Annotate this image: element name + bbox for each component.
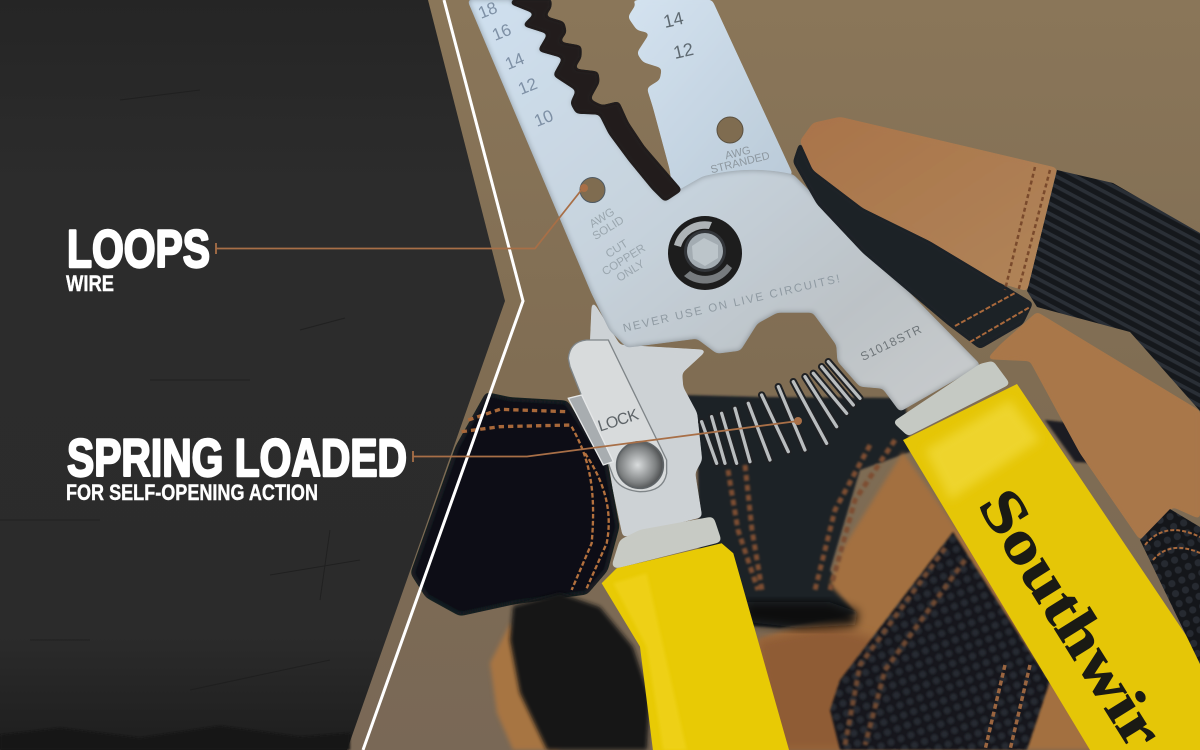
- gauge numbers: 14: [502, 49, 527, 74]
- engraving: never use on live circuits: NEVER USE ON LIVE CIRCUITS!: [622, 273, 841, 335]
- right finger: black trim: [793, 141, 1033, 349]
- leader line: spring: [413, 417, 802, 462]
- engraving: model number: S1018STR: [858, 322, 924, 364]
- engraving: awg solid: SOLID: [591, 214, 626, 243]
- gauge numbers: 12: [515, 74, 540, 99]
- lower thumb: black glove: [510, 593, 650, 750]
- leader line: loops: [216, 184, 588, 254]
- front jaw and pivot plate: [468, 0, 980, 411]
- callout: loops: [66, 184, 588, 296]
- palm stitching: [728, 440, 895, 590]
- palm tan leather: [757, 452, 1095, 750]
- left handle: [602, 517, 790, 750]
- engraving: cut copper only: ONLY: [615, 258, 647, 284]
- back glove: dark palm behind spring: [685, 395, 910, 628]
- numbers on back jaw: 14: [661, 8, 685, 32]
- left finger: black glove: [412, 393, 618, 615]
- spring: [702, 362, 860, 463]
- engraving: cut copper only: [593, 231, 655, 289]
- small black grip pad right: [1140, 509, 1200, 664]
- lock label: LOCK: [596, 406, 641, 435]
- back jaw of the stripper: 12: [671, 39, 695, 63]
- gauge numbers: 10: [531, 106, 556, 131]
- gauge numbers: 16: [489, 20, 514, 45]
- heading: spring loaded: SPRING LOADED: [67, 429, 407, 488]
- lock slider: [568, 340, 667, 492]
- right finger: tan lower leather: [987, 312, 1200, 540]
- engraving: cut copper only: COPPER: [600, 242, 648, 278]
- subheading: for self-opening action: FOR SELF-OPENING ACTION: [66, 480, 318, 505]
- left handle collar: [612, 517, 722, 568]
- rivet: [617, 442, 663, 488]
- lower thumb: tan tip: [490, 622, 560, 750]
- callout: spring loaded: [66, 417, 802, 505]
- engraving: awg stranded: AWG: [724, 144, 752, 162]
- dark chevron panel: [0, 0, 505, 750]
- black grip pad on palm: [830, 532, 1050, 750]
- hole: stranded gauge: [717, 117, 743, 143]
- engraving: awg stranded: STRANDED: [709, 150, 771, 176]
- clip rivet edge: [568, 395, 613, 465]
- blurred black fold under thumb: [745, 602, 858, 628]
- hole: solid gauge: [580, 178, 605, 202]
- gauge numbers: [475, 0, 556, 131]
- white chevron line: [363, 0, 523, 750]
- palm shaded lower leather: [757, 625, 880, 750]
- back glove: dark patch behind right handle: [1045, 420, 1127, 465]
- brand name on handle: Southwir: [966, 477, 1177, 750]
- subheading: wire: WIRE: [66, 271, 114, 296]
- right handle yellow grip: [903, 384, 1200, 750]
- engraving: awg solid: AWG: [588, 206, 617, 231]
- heading: loops: LOOPS: [67, 220, 210, 279]
- pivot bolt: [668, 216, 742, 290]
- right handle collar: [893, 361, 1010, 436]
- lower left arm of the stripper: [590, 300, 707, 537]
- wire cutter gap: [512, 0, 680, 200]
- back jaw of the stripper: [622, 0, 793, 195]
- right finger: tan suede tip: [800, 117, 1057, 292]
- engraving: cut copper only: CUT: [604, 238, 630, 261]
- engraving: awg solid: [584, 204, 626, 243]
- left handle yellow grip: [602, 543, 790, 750]
- right finger: black mesh: [1027, 170, 1200, 411]
